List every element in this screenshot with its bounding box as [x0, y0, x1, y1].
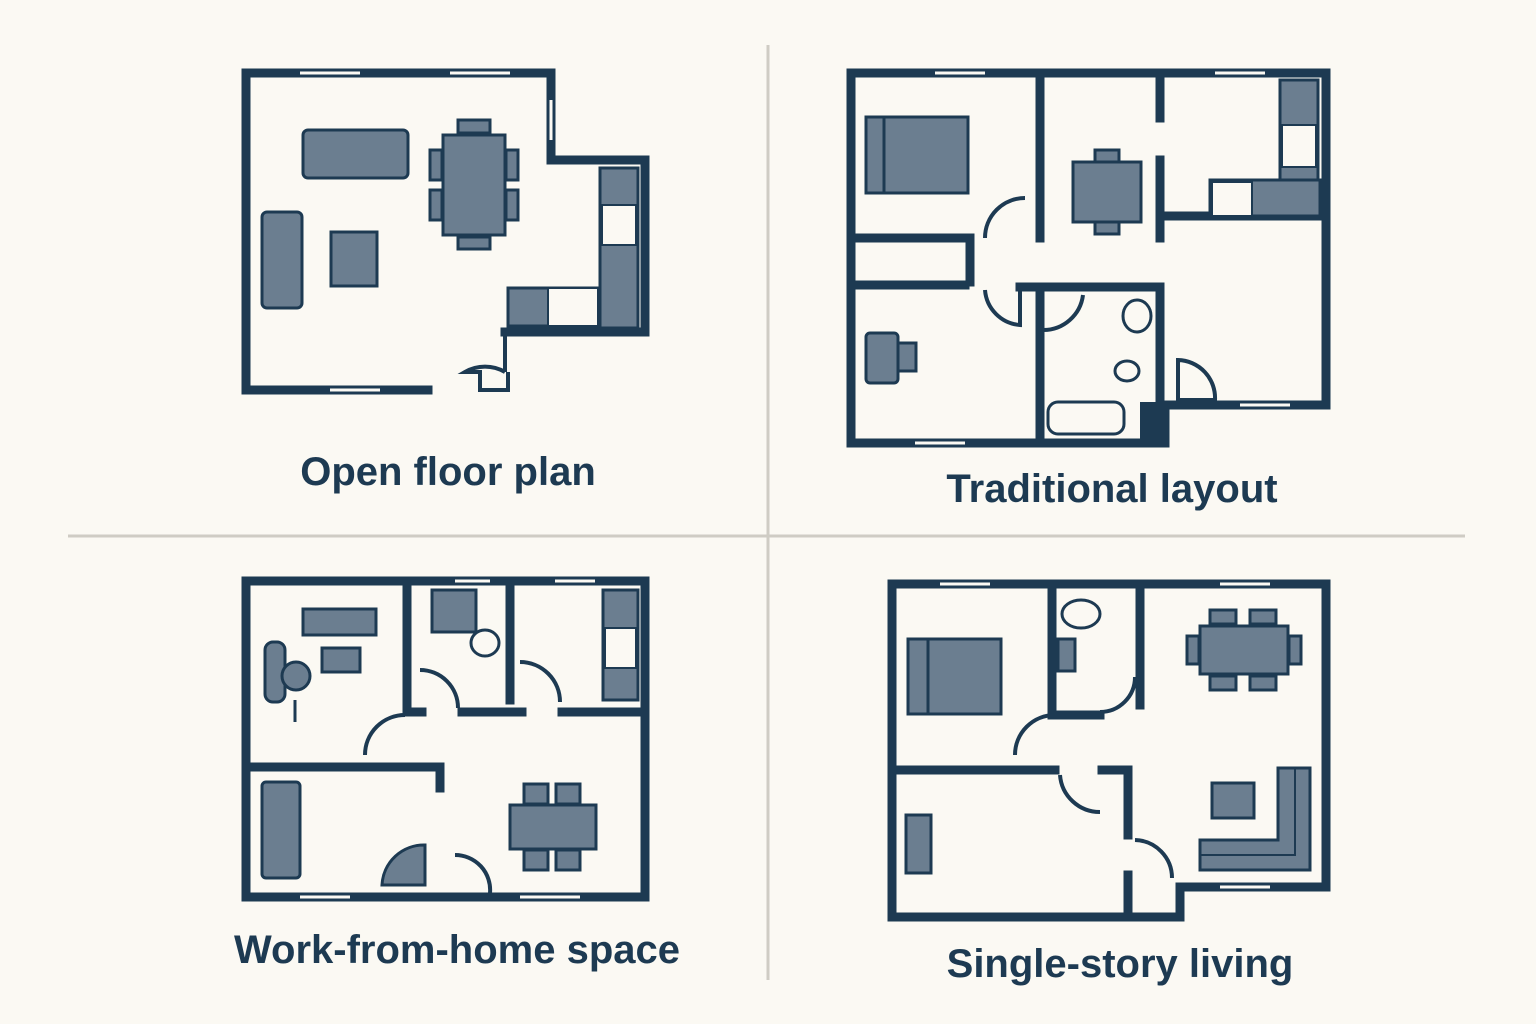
label: work-from-home space: Work-from-home space: [234, 928, 680, 972]
label: open floor plan: Open floor plan: [300, 450, 596, 494]
furniture: [906, 600, 1310, 873]
walls: [246, 581, 645, 897]
furniture: [262, 120, 638, 328]
walls: [851, 73, 1326, 443]
label: single-story living: Single-story living: [947, 942, 1293, 986]
walls: [892, 584, 1326, 917]
walls: [246, 73, 645, 390]
panel: traditional layout: [851, 73, 1326, 443]
furniture: [262, 590, 638, 885]
label: traditional layout: Traditional layout: [946, 467, 1278, 511]
furniture: [866, 80, 1320, 442]
panel: single-story living: [892, 584, 1326, 917]
panel: work-from-home space: [246, 581, 645, 897]
panel: open floor plan: [246, 73, 645, 390]
